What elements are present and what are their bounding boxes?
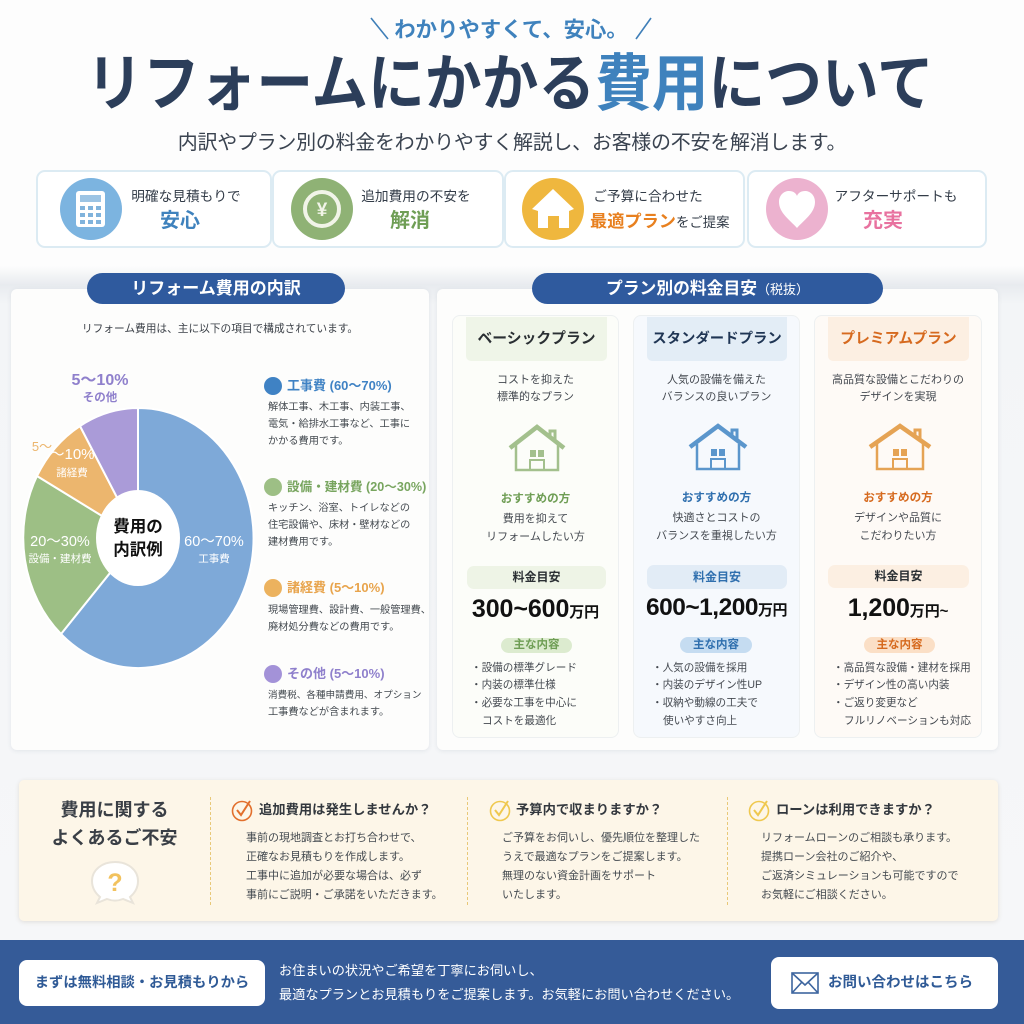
FAQ item: loan: ご返済シミュレーションも可能ですので <box>761 870 959 882</box>
subtitle: 内訳やプラン別の料金をわかりやすく解説し、お客様の不安を解消します。 <box>178 132 846 154</box>
contents list: ・デザイン性の高い内装 <box>833 679 950 691</box>
plan card: standard: 快適さとコストの <box>672 512 760 524</box>
FAQ item: budget: 無理のない資金計画をサポート <box>502 870 656 882</box>
panel heading: plans <box>532 273 883 304</box>
feature card: no extra cost: 解消 <box>390 210 430 232</box>
legend: overhead: 現場管理費、設計費、一般管理費、 <box>268 605 431 616</box>
FAQ item: extra cost: 正確なお見積もりを作成します。 <box>246 851 410 863</box>
legend: construction <box>264 377 411 447</box>
FAQ heading: よくあるご不安 <box>52 828 178 848</box>
feature card: best plan: 最適プランをご提案 <box>590 211 730 231</box>
icon: house <box>522 178 584 240</box>
feature card: no extra cost <box>272 170 504 248</box>
icon: calculator <box>60 178 122 240</box>
legend: equipment: 建材費用です。 <box>268 537 338 548</box>
feature card: clear estimate: 安心 <box>160 210 200 232</box>
footer message: お住まいの状況やご希望を丁寧にお伺いし、 <box>279 963 543 978</box>
plan header: ベーシックプラン <box>477 331 596 347</box>
FAQ item: loan <box>748 800 959 901</box>
panel heading: breakdown: リフォーム費用の内訳 <box>131 279 301 298</box>
legend: equipment: 住宅設備や、床材・壁材などの <box>268 520 410 531</box>
icon: yen coin: ¥ <box>317 200 328 221</box>
FAQ item: budget: いたします。 <box>502 889 567 901</box>
legend: equipment <box>264 478 426 548</box>
contents list: ・高品質な設備・建材を採用 <box>833 662 971 674</box>
FAQ heading: 費用に関する <box>60 800 168 820</box>
plan card: premium: こだわりたい方 <box>860 530 936 542</box>
contents list: 使いやすさ向上 <box>663 715 737 727</box>
page background band <box>0 266 1024 940</box>
contents tag <box>501 638 572 653</box>
footer message: 最適なプランとお見積もりをご提案します。お気軽にお問い合わせください。 <box>279 987 739 1002</box>
plan header <box>828 317 969 361</box>
pie chart <box>24 372 253 668</box>
plan header <box>647 317 787 361</box>
plan card: basic: おすすめの方 <box>501 492 570 505</box>
icon: yen coin <box>291 178 353 240</box>
price: 600~1,200万円 <box>646 594 787 621</box>
icon: yellow check <box>748 800 770 822</box>
divider 3 <box>727 797 728 905</box>
contents list: ・人気の設備を採用 <box>652 662 747 674</box>
intro text: リフォーム費用は、主に以下の項目で構成されています。 <box>82 323 358 335</box>
pie chart: 20〜30% <box>30 534 90 550</box>
icon: envelope <box>791 972 819 994</box>
contents list <box>833 662 971 727</box>
icon: yellow check <box>490 800 510 822</box>
plan card: premium: 高品質な設備とこだわりの <box>832 374 964 386</box>
plan card: standard <box>633 315 800 738</box>
pie chart: 設備・建材費 <box>28 552 92 565</box>
consultation label: まずは無料相談・お見積もりから <box>35 975 249 991</box>
price: 1,200万円~ <box>848 594 948 622</box>
pie chart: 5〜10% <box>72 372 128 389</box>
FAQ item: budget <box>490 800 700 901</box>
contents list: コストを最適化 <box>482 715 556 727</box>
footer message <box>279 963 739 1002</box>
plan card: premium: デザインや品質に <box>854 512 942 524</box>
plan card: premium <box>814 315 982 738</box>
FAQ heading <box>52 800 178 848</box>
contents list: ・設備の標準グレード <box>471 662 577 674</box>
pie chart: 5〜 <box>32 439 52 454</box>
feature card: clear estimate <box>36 170 272 248</box>
title: リフォームにかかる費用について <box>86 50 934 119</box>
plan card: standard: バランスの良いプラン <box>662 391 771 403</box>
legend: other: その他 (5〜10%) <box>287 666 385 681</box>
pie chart: その他 <box>83 390 118 404</box>
legend: other: 消費税、各種申請費用、オプション <box>268 690 422 701</box>
feature card: after support <box>747 170 987 248</box>
tagline: わかりやすくて、安心。 <box>394 18 628 42</box>
icon: orange check <box>232 800 252 822</box>
feature card: clear estimate: 明確な見積もりで <box>131 189 241 204</box>
contents list: ・内装の標準仕様 <box>471 679 556 691</box>
contents list <box>652 662 762 727</box>
plan header: プレミアムプラン <box>840 331 957 347</box>
contact button: お問い合わせはこちら <box>828 975 973 991</box>
panel: cost breakdown <box>11 289 429 750</box>
feature card: no extra cost: 追加費用の不安を <box>361 189 471 204</box>
FAQ item: budget: うえで最適なプランをご提案します。 <box>502 851 688 863</box>
plan card: basic: 標準的なプラン <box>497 391 574 403</box>
legend: construction: 解体工事、木工事、内装工事、 <box>268 402 411 413</box>
footer banner <box>0 940 1024 1024</box>
legend: construction: 電気・給排水工事など、工事に <box>268 419 410 430</box>
price label <box>828 565 969 588</box>
plan card: premium: おすすめの方 <box>863 491 933 504</box>
legend: construction: 工事費 (60〜70%) <box>287 378 392 393</box>
feature card: after support: 充実 <box>863 210 903 232</box>
legend: overhead: 廃材処分費などの費用です。 <box>268 622 399 633</box>
plan header <box>466 317 607 361</box>
contents list: ・内装のデザイン性UP <box>652 679 762 691</box>
price: 300~600万円 <box>472 595 599 623</box>
FAQ item: loan: 提携ローン会社のご紹介や、 <box>761 851 903 863</box>
legend: equipment: 設備・建材費 (20〜30%) <box>287 480 426 494</box>
feature card: best plan <box>504 170 745 248</box>
panel heading: plans: プラン別の料金目安（税抜） <box>606 279 809 298</box>
feature card: after support: アフターサポートも <box>835 189 957 204</box>
FAQ item: loan: リフォームローンのご相談も承ります。 <box>761 832 957 844</box>
FAQ item: loan: お気軽にご相談ください。 <box>761 889 893 901</box>
plan card: basic: コストを抑えた <box>497 374 574 386</box>
divider 2 <box>467 797 468 905</box>
icon: green house <box>508 424 566 472</box>
FAQ item: loan: ローンは利用できますか？ <box>776 802 935 817</box>
plan card: standard: 人気の設備を備えた <box>667 374 766 386</box>
contents tag <box>864 637 935 653</box>
legend: construction: かかる費用です。 <box>268 436 348 447</box>
panel: plans <box>437 289 998 750</box>
contents list <box>471 662 577 727</box>
price label: 料金目安 <box>874 569 922 583</box>
panel heading: breakdown <box>87 273 345 304</box>
price label: 料金目安 <box>512 570 560 584</box>
icon: question bubble <box>91 861 139 905</box>
FAQ item: extra cost: 追加費用は発生しませんか？ <box>259 802 431 817</box>
plan card: premium: デザインを実現 <box>860 391 936 403</box>
contents list: フルリノベーションも対応 <box>844 715 971 727</box>
contact button <box>771 957 998 1009</box>
FAQ item: extra cost: 事前の現地調査とお打ち合わせで、 <box>246 832 422 844</box>
consultation label <box>19 960 265 1006</box>
FAQ item: budget: 予算内で収まりますか？ <box>516 802 662 817</box>
plan card: basic: 費用を抑えて <box>503 513 568 525</box>
FAQ item: budget: ご予算をお伺いし、優先順位を整理した <box>502 832 700 844</box>
legend: overhead: 諸経費 (5〜10%) <box>287 580 385 595</box>
legend: other <box>264 665 422 718</box>
divider 1 <box>210 797 211 905</box>
icon: blue house <box>688 423 748 470</box>
pie chart: 費用の <box>113 517 163 536</box>
icon: heart <box>766 178 828 240</box>
icon: orange house <box>868 423 932 470</box>
legend: other: 工事費などが含まれます。 <box>268 707 389 718</box>
FAQ item: extra cost: 事前にご説明・ご承諾をいただきます。 <box>246 889 443 901</box>
contents tag: 主な内容 <box>693 639 739 651</box>
contents tag: 主な内容 <box>876 639 922 651</box>
legend: overhead <box>264 579 431 633</box>
contents list: ・ご返り変更など <box>833 697 918 709</box>
FAQ item: extra cost <box>232 800 443 901</box>
plan header: スタンダードプラン <box>652 331 782 347</box>
legend: equipment: キッチン、浴室、トイレなどの <box>268 503 410 514</box>
FAQ item: extra cost: 工事中に追加が必要な場合は、必ず <box>246 870 422 882</box>
contents list: ・収納や動線の工夫で <box>652 697 758 709</box>
pie chart: 内訳例 <box>113 540 163 559</box>
pie chart: 〜10% <box>49 446 95 463</box>
plan card: basic <box>452 315 619 738</box>
price label <box>647 565 787 589</box>
panel: FAQ <box>19 780 998 921</box>
plan card: basic: リフォームしたい方 <box>486 531 585 543</box>
contents list: ・必要な工事を中心に <box>471 697 577 709</box>
pie chart: 60〜70% <box>184 534 244 550</box>
icon: question bubble: ? <box>107 869 123 897</box>
price label <box>467 566 606 589</box>
price label: 料金目安 <box>693 570 741 584</box>
contents tag <box>680 637 752 653</box>
contents tag: 主な内容 <box>514 639 560 651</box>
feature card: best plan: ご予算に合わせた <box>593 189 703 204</box>
plan card: standard: おすすめの方 <box>682 491 751 504</box>
plan card: standard: バランスを重視したい方 <box>656 530 777 542</box>
pie chart: 諸経費 <box>56 466 88 479</box>
pie chart: 工事費 <box>198 552 230 565</box>
